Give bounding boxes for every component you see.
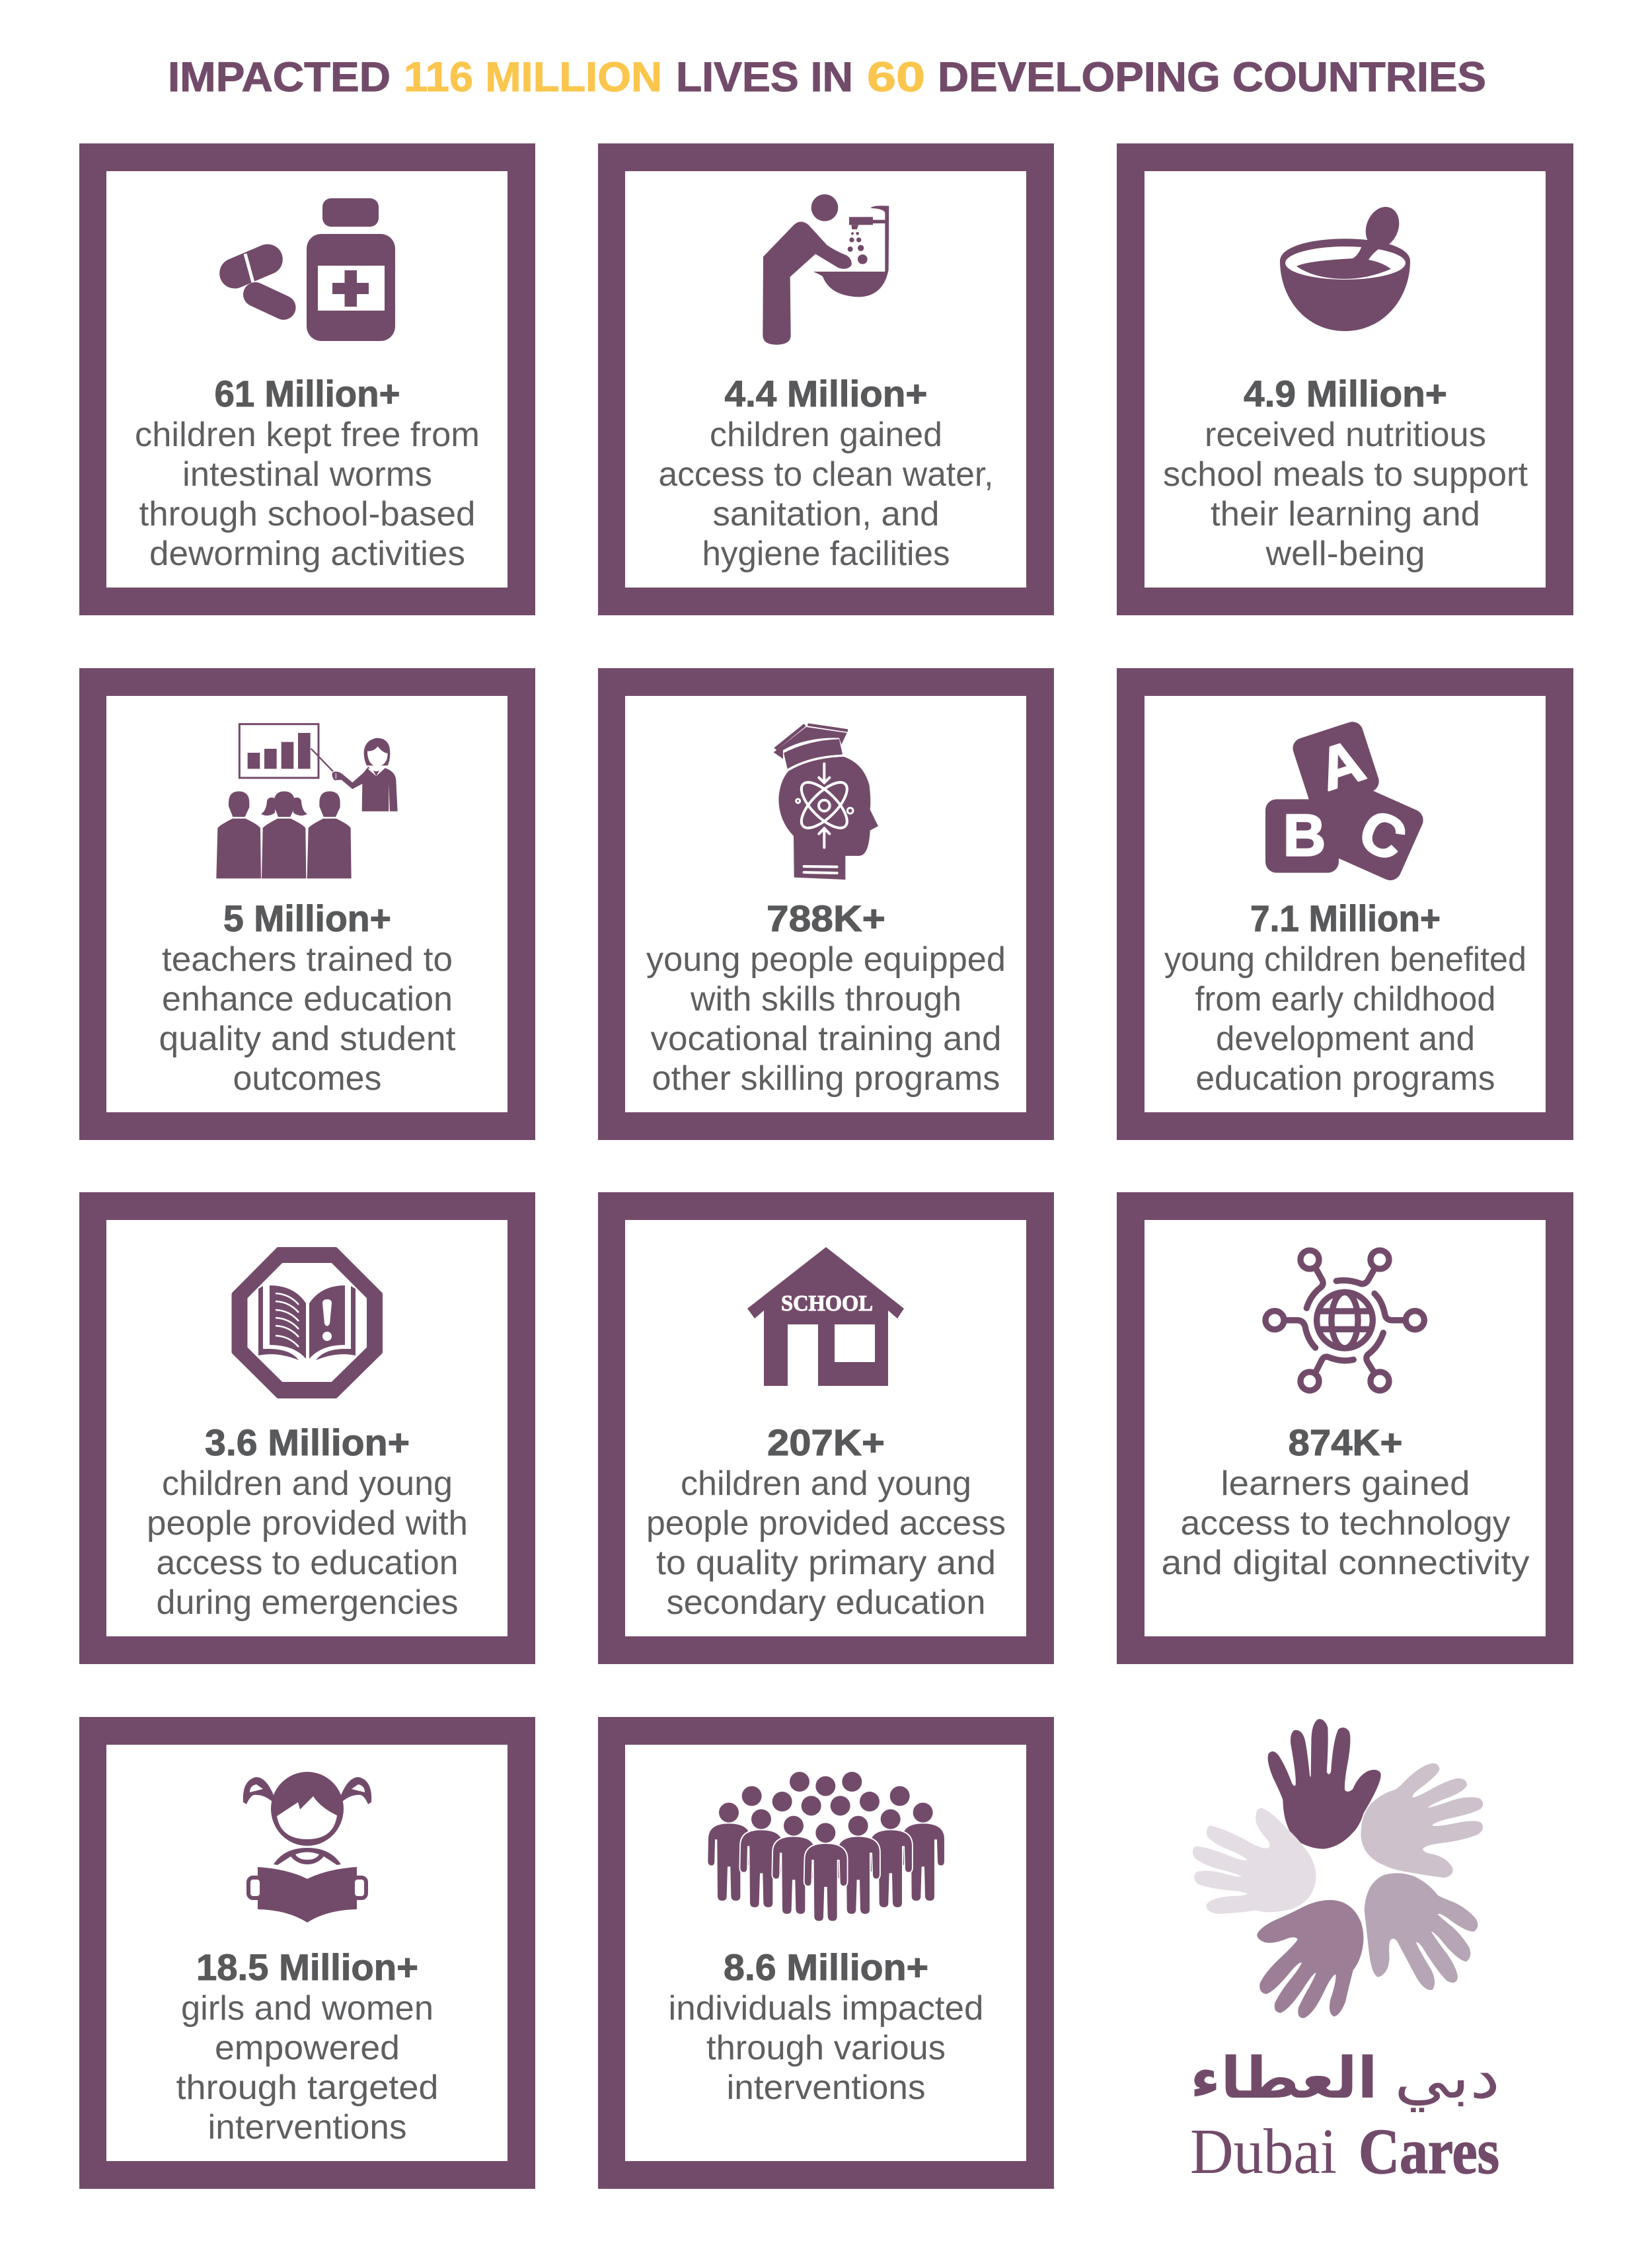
description: learners gained	[1221, 1465, 1470, 1503]
description: children and young	[681, 1465, 971, 1503]
title	[168, 54, 1486, 100]
description: access to technology	[1180, 1504, 1511, 1542]
description: through targeted	[176, 2069, 439, 2107]
panel: technology access	[1117, 1192, 1573, 1664]
description: interventions	[727, 2069, 925, 2107]
statistic: 18.5 Million+	[196, 1946, 418, 1988]
statistic: 61 Million+	[214, 373, 400, 414]
description: sanitation, and	[712, 495, 940, 533]
title: IMPACTED	[168, 54, 391, 100]
description	[1164, 940, 1526, 1098]
icon: five hands	[1193, 1720, 1482, 2017]
statistic: 7.1 Million+	[1250, 897, 1441, 939]
panel: deworming	[79, 143, 535, 615]
icon: bowl with spoon	[1280, 202, 1410, 331]
panel: primary and secondary education	[598, 1192, 1054, 1664]
icon: medicine bottle and pills	[215, 198, 395, 341]
description	[646, 1465, 1006, 1622]
logo text: Arabic: دبي	[1394, 2043, 1500, 2112]
statistic: 8.6 Million+	[724, 1946, 928, 1988]
description: teachers trained to	[162, 940, 453, 979]
description: during emergencies	[156, 1583, 459, 1622]
description: received nutritious	[1205, 416, 1486, 454]
description: young people equipped	[646, 940, 1006, 979]
icon: alphabet blocks: B	[1283, 802, 1326, 868]
description: children gained	[710, 416, 942, 454]
description: hygiene facilities	[702, 535, 950, 573]
description: empowered	[215, 2029, 400, 2067]
panel: education in emergencies	[79, 1192, 535, 1664]
statistic: 788K+	[767, 897, 885, 939]
title: DEVELOPING COUNTRIES	[938, 54, 1486, 100]
title: 60	[867, 54, 925, 100]
description: from early childhood	[1195, 980, 1496, 1018]
description	[1163, 416, 1528, 573]
description: to quality primary and	[656, 1544, 996, 1582]
description: access to clean water,	[658, 455, 994, 494]
description: interventions	[207, 2108, 407, 2147]
description: and digital connectivity	[1162, 1544, 1529, 1582]
description: people provided with	[147, 1504, 468, 1542]
description: through school-based	[139, 495, 476, 533]
description	[147, 1465, 468, 1622]
panel: water and sanitation	[598, 143, 1054, 615]
description: intestinal worms	[182, 455, 432, 494]
description	[176, 1989, 439, 2147]
statistic: 874K+	[1289, 1422, 1402, 1463]
icon: school house	[747, 1247, 904, 1386]
icon: connected globe	[1265, 1250, 1424, 1390]
description: their learning and	[1211, 495, 1480, 533]
description: school meals to support	[1163, 455, 1528, 494]
logo: Dubai Cares	[1190, 1720, 1500, 2187]
panel: girls and women	[79, 1717, 535, 2189]
icon: alphabet blocks: A	[1311, 727, 1372, 803]
description: girls and women	[181, 1989, 433, 2028]
description: with skills through	[690, 980, 961, 1018]
icon: alphabet blocks: C	[1350, 796, 1415, 874]
description: other skilling programs	[652, 1059, 1000, 1098]
statistic: 4.9 Million+	[1244, 373, 1447, 414]
description: young children benefited	[1164, 940, 1526, 979]
logo text: English: Cares	[1359, 2116, 1499, 2187]
panel: early childhood	[1117, 668, 1573, 1140]
logo text: Arabic	[1190, 2043, 1500, 2112]
description: development and	[1216, 1020, 1475, 1058]
logo text: English: Dubai	[1190, 2116, 1337, 2187]
statistic: 3.6 Million+	[205, 1422, 410, 1463]
description: quality and student	[159, 1020, 456, 1058]
description: vocational training and	[650, 1020, 1002, 1058]
description	[159, 940, 456, 1098]
description: outcomes	[233, 1059, 382, 1098]
description	[658, 416, 994, 573]
description: people provided access	[646, 1504, 1006, 1542]
description: education programs	[1196, 1059, 1495, 1098]
description	[135, 416, 480, 573]
description	[646, 940, 1006, 1098]
description: access to education	[156, 1544, 459, 1582]
panel: individuals impacted	[598, 1717, 1054, 2189]
title: 116 MILLION	[404, 54, 662, 100]
statistic: 4.4 Million+	[724, 373, 928, 414]
logo text: English	[1190, 2116, 1499, 2187]
description: children kept free from	[135, 416, 480, 454]
panel: teachers trained	[79, 668, 535, 1140]
icon: school house: SCHOOL	[781, 1291, 873, 1316]
logo text: Arabic: العطاء	[1190, 2045, 1378, 2112]
panel: school meals	[1117, 143, 1573, 615]
description: deworming activities	[149, 535, 465, 573]
statistic: 207K+	[767, 1422, 885, 1463]
icon: graduate head with atom	[774, 723, 878, 880]
statistic: 5 Million+	[223, 897, 391, 939]
description: secondary education	[666, 1583, 986, 1622]
panel: vocational skills	[598, 668, 1054, 1140]
icon: teacher and students	[216, 724, 398, 878]
icon: crowd of people	[708, 1772, 944, 1921]
description: through various	[706, 2029, 946, 2067]
description: well-being	[1265, 535, 1425, 573]
description	[1162, 1465, 1529, 1582]
title: LIVES IN	[676, 54, 853, 100]
icon: book in octagon	[234, 1249, 381, 1396]
description: children and young	[162, 1465, 453, 1503]
description	[669, 1989, 983, 2107]
icon: alphabet blocks	[1265, 719, 1427, 884]
icon: person washing hands	[763, 194, 889, 345]
description: enhance education	[162, 980, 453, 1018]
description: individuals impacted	[669, 1989, 983, 2028]
icon: girl reading a book	[243, 1772, 371, 1923]
